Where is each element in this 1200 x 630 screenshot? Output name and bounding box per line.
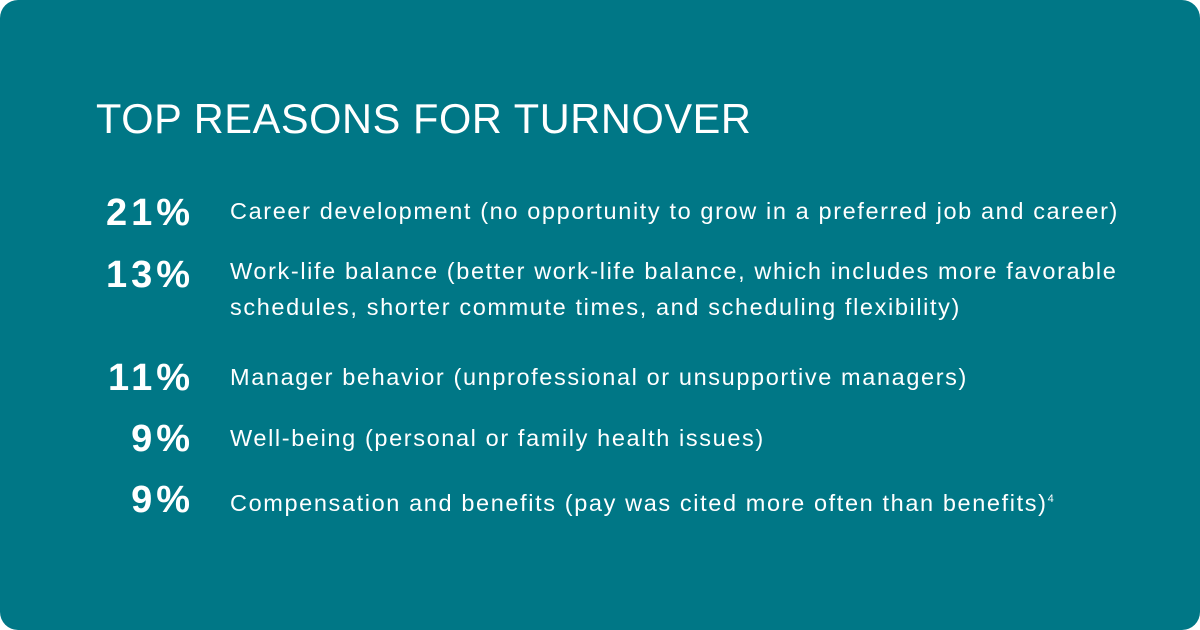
row: manager behavior [108,357,968,399]
row: compensation: Compensation and benefits (pay was cited more often than benefits)4 [230,490,1055,516]
row: well-being: 9% [131,418,194,460]
row: well-being: Well-being (personal or family health issues) [230,425,765,451]
row: career development: 21% [106,192,194,234]
row: compensation [131,479,1055,521]
row: career development: Career development (no opportunity to grow in a preferred job and career) [230,198,1119,224]
row: compensation: 9% [131,479,194,521]
row: work-life balance: Work-life balance (better work-life balance, which includes more favorable [230,258,1117,284]
title: TOP REASONS FOR TURNOVER [96,95,751,142]
row: manager behavior: 11% [108,357,194,399]
row: work-life balance [106,254,1117,320]
row: well-being [131,418,765,460]
row: work-life balance: schedules, shorter commute times, and scheduling flexibility) [230,294,961,320]
row: manager behavior: Manager behavior (unprofessional or unsupportive managers) [230,364,968,390]
row: career development [106,192,1119,234]
row: work-life balance: 13% [106,254,194,296]
